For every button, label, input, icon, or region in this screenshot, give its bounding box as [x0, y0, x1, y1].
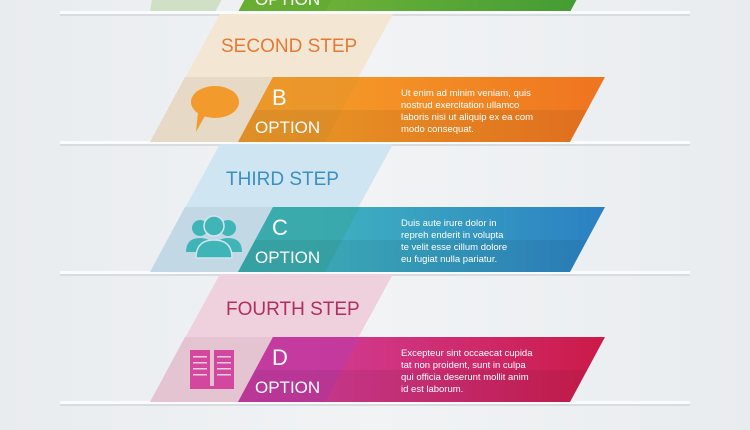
icon: speech bubble: [191, 86, 239, 132]
bar C: eu fugiat nulla pariatur.: [401, 254, 497, 265]
bar D: id est laborum.: [401, 384, 463, 395]
bar D: OPTION: [255, 378, 320, 397]
icon: book: [190, 350, 234, 389]
step B panel: [150, 14, 605, 142]
bar C: C: [272, 215, 288, 240]
bar B: Ut enim ad minim veniam, quis: [401, 88, 531, 99]
title: second step: SECOND STEP: [221, 36, 357, 57]
bar B: [238, 77, 605, 142]
bar C: [238, 207, 605, 272]
bar C: Duis aute irure dolor in: [401, 218, 497, 229]
bar B: modo consequat.: [401, 124, 474, 135]
dividers: [60, 11, 690, 404]
bar C: te velit esse cillum dolore: [401, 242, 507, 253]
bar D: [238, 337, 605, 402]
step C panel: [150, 144, 605, 272]
bar D: D: [272, 345, 288, 370]
title: fourth step: FOURTH STEP: [226, 299, 360, 320]
bar C: OPTION: [255, 248, 320, 267]
step D panel: [150, 274, 605, 402]
bar B: nostrud exercitation ullamco: [401, 100, 519, 111]
bar B: B: [272, 85, 287, 110]
bar C: repreh enderit in volupta: [401, 230, 504, 241]
bar D: tat non proident, sunt in culpa: [401, 360, 526, 371]
icon: people: [186, 216, 242, 258]
title: third step: THIRD STEP: [226, 169, 339, 190]
section A (partial): [150, 0, 605, 12]
bar B: laboris nisi ut aliquip ex ea com: [401, 112, 533, 123]
bar D: qui officia deserunt mollit anim: [401, 372, 529, 383]
bar B: OPTION: [255, 118, 320, 137]
bar D: Excepteur sint occaecat cupida: [401, 348, 533, 359]
